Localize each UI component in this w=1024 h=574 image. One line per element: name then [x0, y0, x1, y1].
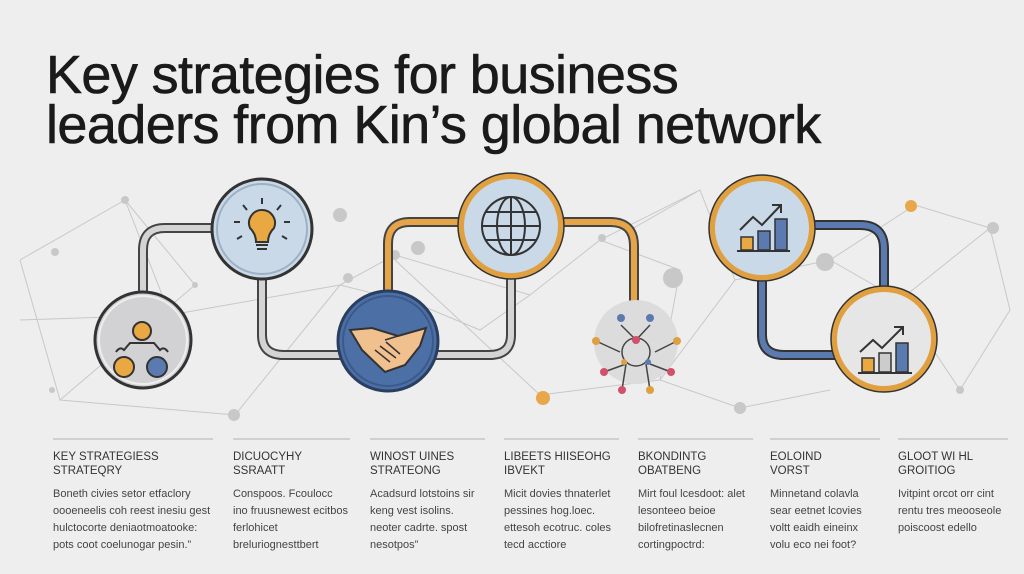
icon: handshake circle — [338, 291, 438, 391]
icon: network node — [592, 300, 681, 394]
column 7: GROITIOG — [898, 465, 956, 477]
icon: team circle — [95, 292, 191, 388]
column 2: SSRAATT — [233, 465, 285, 477]
column 5: BKONDINTG — [638, 451, 706, 463]
column 7 — [898, 438, 1008, 534]
column 7: Ivitpint orcot orr cint rentu tres meooseole poiscoost edello — [898, 488, 1001, 534]
column 2: Conspoos. Fcoulocc ino fruusnewest ecitbos ferlohicet breluriognesttbert — [233, 488, 348, 551]
title: Key strategies for business — [46, 45, 678, 105]
column 1: STRATEQRY — [53, 465, 122, 477]
icon: globe circle — [458, 173, 564, 279]
column 4: IBVEKT — [504, 465, 545, 477]
column 3: WINOST UINES — [370, 451, 454, 463]
column 1: Boneth civies setor etfaclory oooeneelis coh reest inesiu gest hulctocorte deniaotmoatooke: pots coot coelunogar pesin.” — [53, 488, 210, 551]
column 1: KEY STRATEGIESS — [53, 451, 159, 463]
column 5: OBATBENG — [638, 465, 701, 477]
column 3: Acadsurd lotstoins sir keng vest isolins. neoter cadrte. spost nesotpos” — [370, 488, 475, 551]
column 1 — [53, 438, 213, 551]
title — [46, 45, 822, 155]
column 6: EOLOIND — [770, 451, 822, 463]
column 4: Micit dovies thnaterlet pessines hog.loec. ettesoh ecotruc. coles tecd acctiore — [504, 488, 611, 551]
column 7: GLOOT WI HL — [898, 451, 973, 463]
icon: lightbulb circle — [212, 179, 312, 279]
column 6 — [770, 438, 880, 551]
column 3 — [370, 438, 485, 551]
column 6: VORST — [770, 465, 810, 477]
connector: gray pipes — [143, 222, 884, 355]
column 3: STRATEONG — [370, 465, 441, 477]
column 2: DICUOCYHY — [233, 451, 302, 463]
icon: growth chart circle 2 — [831, 286, 937, 392]
column 6: Minnetand colavla sear eetnet lcovies voltt eaidh eineinx volu eco nei foot? — [770, 488, 862, 551]
column 5: Mirt foul lcesdoot: alet lesonteeo beioe bilofretinaslecnen cortingpoctrd: — [638, 488, 745, 551]
column 4: LIBEETS HIISEOHG — [504, 451, 611, 463]
column 5 — [638, 438, 753, 551]
title: leaders from Kin’s global network — [46, 95, 821, 155]
column 4 — [504, 438, 619, 551]
icon: growth chart circle — [709, 175, 815, 281]
column 2 — [233, 438, 350, 551]
